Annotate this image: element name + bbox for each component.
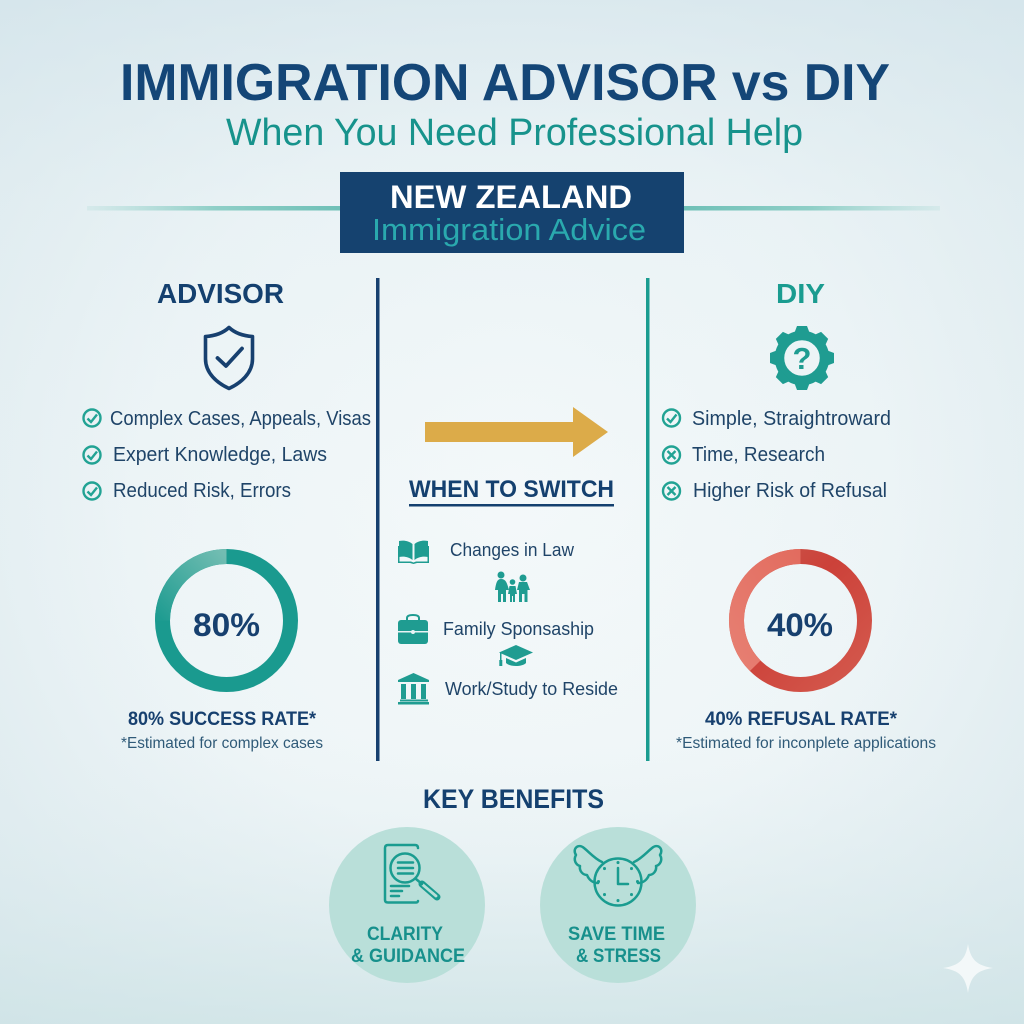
success rate footnote: *Estimated for complex cases: [121, 735, 323, 752]
icon: gear with question mark: ?: [793, 341, 811, 376]
icon: family: [495, 572, 530, 602]
banner: New Zealand Immigration Advice: [340, 172, 684, 253]
banner: New Zealand Immigration Advice: NEW ZEALAND: [390, 179, 632, 215]
advisor benefits list: [84, 408, 371, 502]
icon: gear with question mark: [770, 326, 834, 390]
icon: sparkle star: [943, 944, 993, 993]
list item: higher risk: Higher Risk of Refusal: [693, 480, 887, 502]
donut chart: 40%: [736, 556, 864, 684]
arrow: [425, 407, 608, 457]
list item: complex cases: Complex Cases, Appeals, Visas: [110, 408, 371, 430]
donut chart: 80%: 80%: [193, 607, 260, 643]
panel: key benefits: [329, 784, 696, 983]
banner: New Zealand Immigration Advice: Immigration Advice: [372, 212, 646, 247]
text: family sponsorship: Family Sponsaship: [443, 619, 594, 639]
refusal rate label: 40% REFUSAL RATE*: [705, 709, 898, 730]
title: IMMIGRATION ADVISOR vs DIY: [120, 54, 890, 112]
stress text: & STRESS: [576, 946, 661, 967]
when to switch heading: WHEN TO SWITCH: [409, 476, 614, 503]
icon: institution building: [398, 673, 429, 704]
icon: shield with check: [206, 328, 252, 388]
list item: expert knowledge: Expert Knowledge, Laws: [113, 444, 327, 466]
divider line right: [684, 206, 940, 210]
benefit: clarity and guidance: [329, 827, 485, 983]
panel divider: teal vertical line: [646, 278, 650, 761]
guidance text: & GUIDANCE: [351, 946, 465, 967]
text: changes in law: Changes in Law: [450, 540, 575, 560]
DIY points list: [663, 408, 891, 502]
panel: when to switch: [398, 407, 618, 704]
divider line left: [87, 206, 341, 210]
icon: open book: [398, 541, 429, 564]
list item: reduced risk: Reduced Risk, Errors: [113, 480, 291, 502]
panel: DIY: [663, 278, 936, 752]
advisor heading: ADVISOR: [157, 278, 284, 309]
donut chart: 80%: [162, 556, 290, 684]
clarity text: CLARITY: [367, 924, 443, 945]
donut chart: 40%: 40%: [767, 607, 833, 643]
DIY heading: DIY: [776, 278, 825, 309]
save time text: SAVE TIME: [568, 924, 665, 945]
list item: simple: Simple, Straightroward: [692, 408, 891, 430]
refusal rate footnote: *Estimated for inconplete applications: [676, 735, 936, 752]
key benefits heading: KEY BENEFITS: [423, 784, 604, 814]
icon: winged clock: [575, 846, 661, 906]
heading underline: [409, 504, 614, 506]
subtitle: When You Need Professional Help: [226, 112, 803, 154]
list item: time: Time, Research: [692, 444, 825, 466]
text: work/study to reside: Work/Study to Reside: [445, 679, 618, 699]
success rate label: 80% SUCCESS RATE*: [128, 709, 317, 730]
panel divider: navy vertical line: [376, 278, 380, 761]
icon: briefcase: [398, 615, 428, 644]
icon: document with magnifier: [385, 845, 437, 902]
benefit: save time and stress: [540, 827, 696, 983]
panel: advisor: [84, 278, 371, 752]
icon: graduation cap: [499, 645, 533, 666]
